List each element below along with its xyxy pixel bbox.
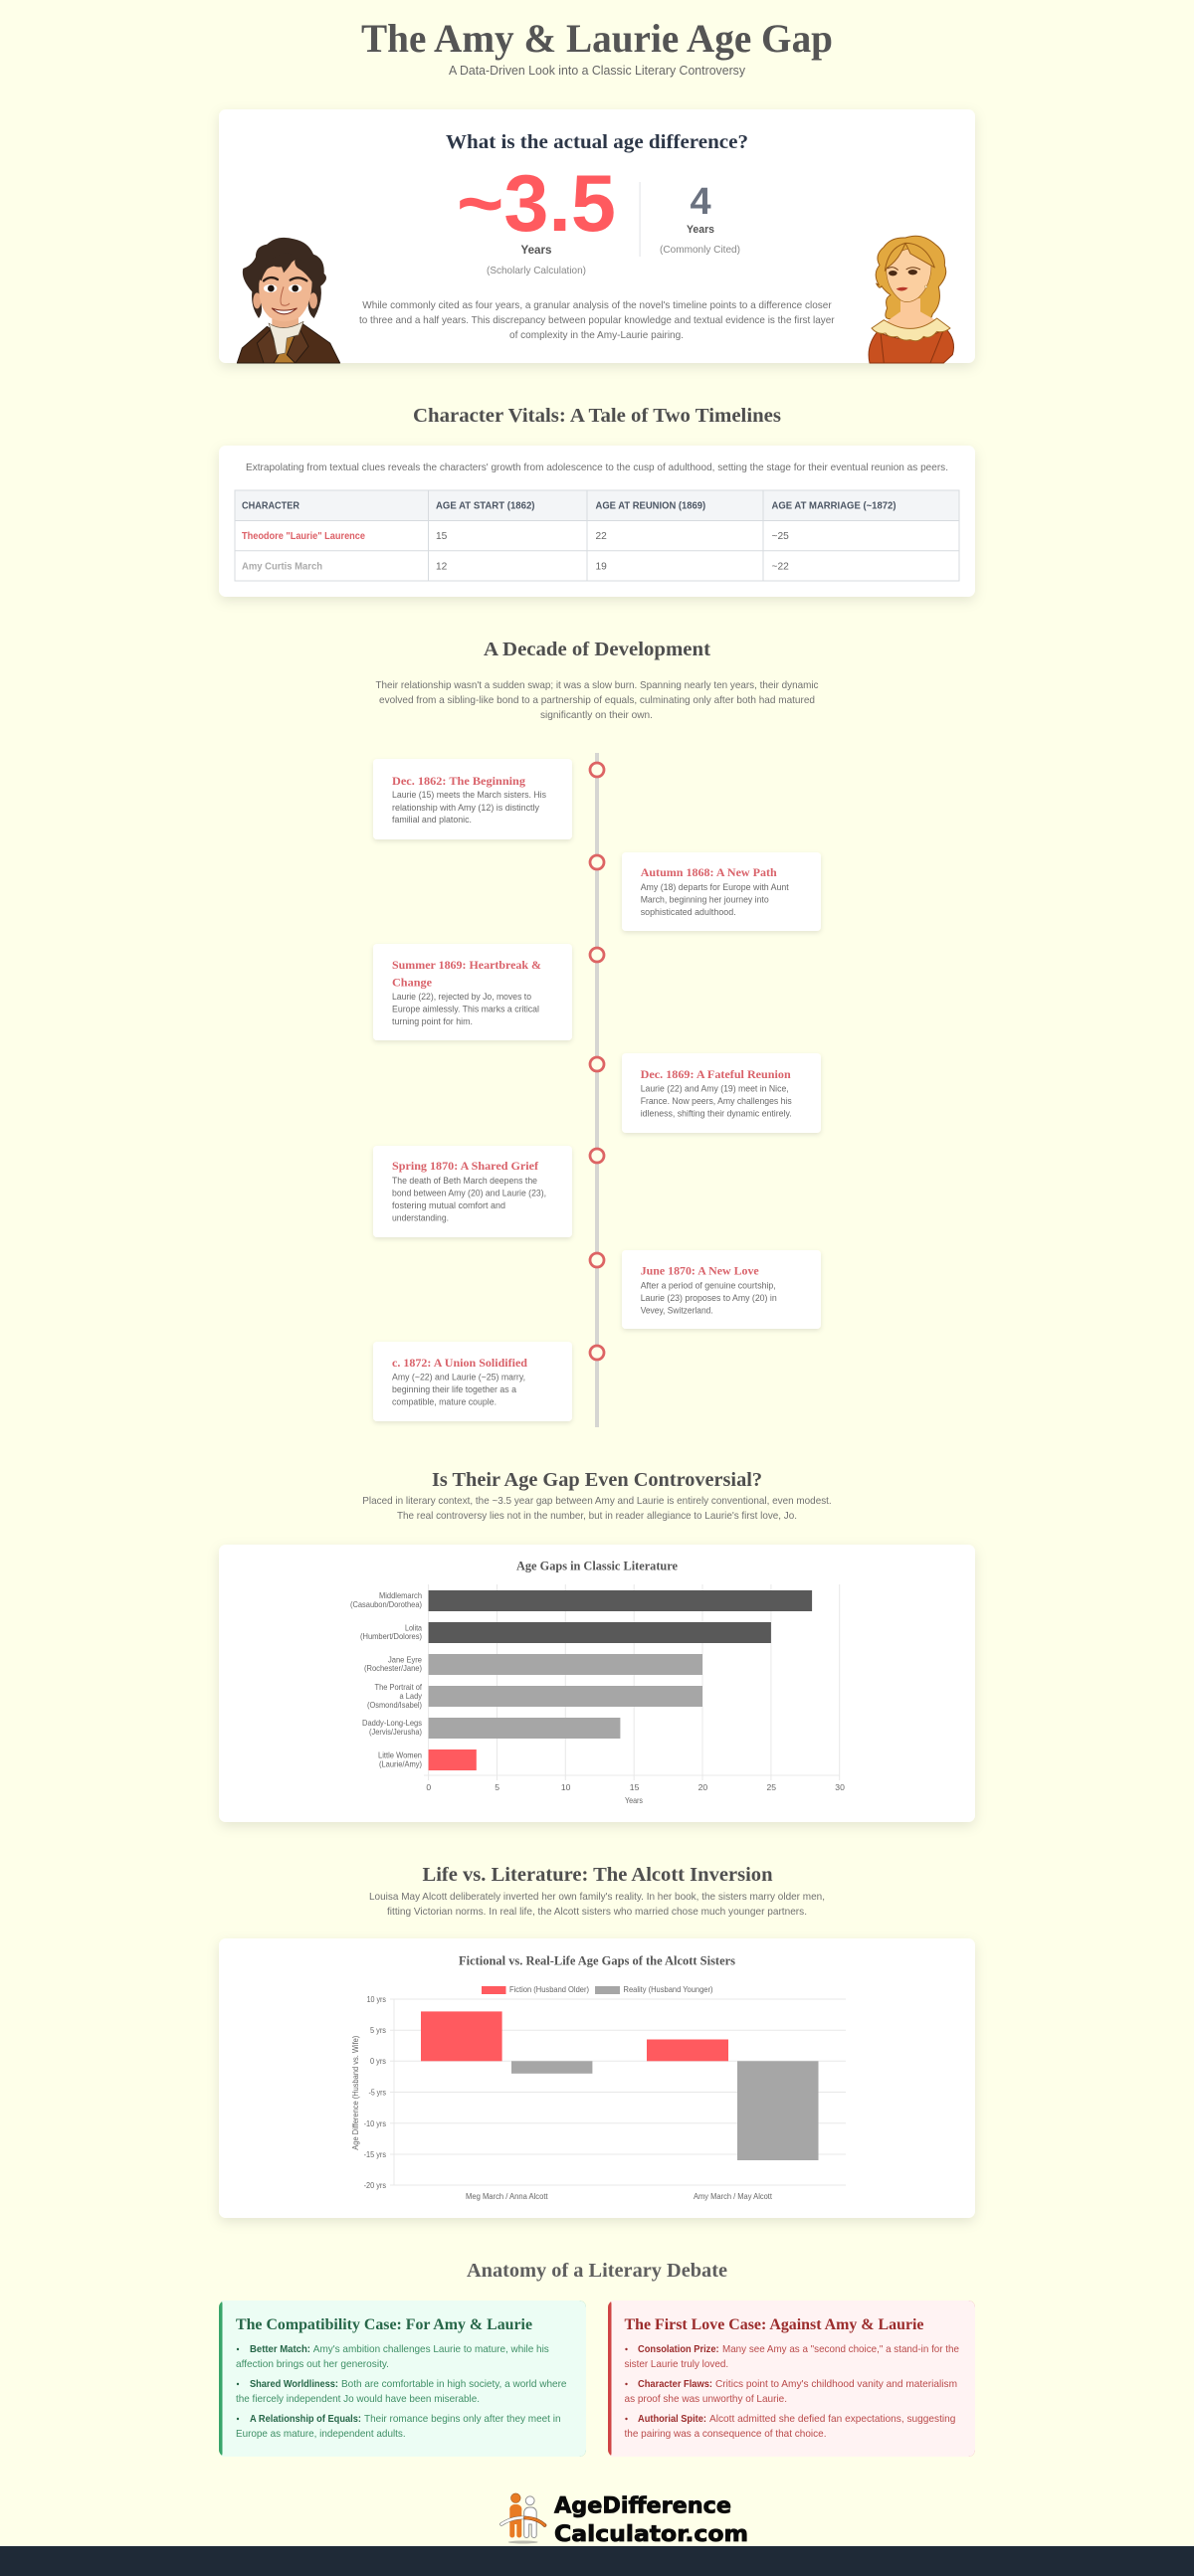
panel heading: first love case: The First Love Case: Against Amy & Laurie xyxy=(625,2316,923,2333)
stat: commonly cited: (Commonly Cited) xyxy=(660,245,740,256)
timeline event: Spring 1870: Spring 1870: A Shared Grief xyxy=(392,1159,539,1173)
timeline event: c. 1872: Amy (~22) and Laurie (~25) marry, xyxy=(392,1373,525,1382)
bar chart: age gaps in classic literature: (Rochester/Jane) xyxy=(364,1663,422,1673)
panel: case against xyxy=(608,2300,975,2457)
list: first love arguments: Alcott admitted she defied fan expectations, suggesting xyxy=(709,2414,956,2425)
bar chart: age gaps in classic literature: Little Women xyxy=(378,1750,422,1760)
bar chart: age gaps in classic literature: 10 xyxy=(561,1782,571,1792)
legend: Fiction (Husband Older) xyxy=(509,1984,589,1994)
text block: decade intro: evolved from a sibling-like bond to a partnership of equals, culminating only after both had matured xyxy=(379,695,815,706)
panel: Alcott chart xyxy=(219,1938,975,2218)
timeline event: Autumn 1868 xyxy=(590,852,821,931)
table: ~22 xyxy=(772,561,789,573)
table: AGE AT REUNION (1869) xyxy=(595,501,705,511)
stat: commonly cited: Years xyxy=(687,224,714,236)
bar chart: age gaps in classic literature: (Jervis/Jerusha) xyxy=(369,1727,422,1737)
text block: Alcott inversion intro: fitting Victorian norms. In real life, the Alcott sisters who married chose much younger partners. xyxy=(387,1907,807,1918)
heading: literary debate: Anatomy of a Literary Debate xyxy=(467,2260,727,2282)
bar chart: fiction vs reality: -10 yrs xyxy=(364,2118,386,2128)
text block: controversy intro: The real controversy lies not in the number, but in reader allegiance to Laurie's first love, Jo. xyxy=(397,1511,797,1522)
timeline event: Summer 1869: Change xyxy=(392,975,433,989)
list: first love arguments: Critics point to Amy's childhood vanity and materialism xyxy=(715,2379,957,2390)
subtitle: A Data-Driven Look into a Classic Literary Controversy xyxy=(449,63,745,78)
timeline event: Summer 1869: Europe aimlessly. This marks a critical xyxy=(392,1005,539,1014)
bar chart: fiction vs reality: -20 yrs xyxy=(364,2180,386,2190)
bar chart: fiction vs reality: Amy March / May Alcott xyxy=(694,2191,773,2201)
list: compatibility arguments: A Relationship of Equals: xyxy=(250,2414,361,2425)
stat: scholarly calculation: (Scholarly Calculation) xyxy=(487,266,586,276)
bar chart: age gaps in classic literature: Middlemarch xyxy=(379,1590,422,1600)
list: compatibility arguments: Both are comfortable in high society, a world where xyxy=(341,2379,567,2390)
bar chart: fiction vs reality: 0 yrs xyxy=(370,2056,386,2066)
bar chart: age gaps in classic literature: Years xyxy=(625,1795,643,1805)
bar chart: fiction vs reality: 5 yrs xyxy=(370,2025,386,2035)
table: CHARACTER xyxy=(242,501,300,511)
text block: decade intro: Their relationship wasn't a sudden swap; it was a slow burn. Spanning nearly ten years, their dynamic xyxy=(376,680,818,691)
heading: Alcott inversion: Life vs. Literature: The Alcott Inversion xyxy=(422,1864,772,1886)
table: 19 xyxy=(595,561,607,573)
timeline event: c. 1872: beginning their life together as a xyxy=(392,1384,516,1394)
text block: decade intro: significantly on their own. xyxy=(540,710,653,721)
timeline event: Autumn 1868: Autumn 1868: A New Path xyxy=(641,865,777,879)
timeline event: Dec 1862 xyxy=(373,759,604,839)
list: compatibility arguments: affection brings out her generosity. xyxy=(236,2359,389,2370)
timeline event: Spring 1870: bond between Amy (20) and Laurie (23), xyxy=(392,1188,546,1197)
panel: character vitals table xyxy=(219,446,975,597)
timeline event: Summer 1869: Laurie (22), rejected by Jo, moves to xyxy=(392,992,531,1002)
timeline event: c. 1872 xyxy=(373,1342,604,1421)
list: compatibility arguments: Amy's ambition challenges Laurie to mature, while his xyxy=(313,2344,549,2355)
bar chart: age gaps in classic literature: 25 xyxy=(766,1782,776,1792)
timeline event: Dec 1862: Dec. 1862: The Beginning xyxy=(392,774,525,788)
timeline event: Spring 1870: The death of Beth March deepens the xyxy=(392,1176,537,1186)
list: first love arguments: Many see Amy as a "second choice," a stand-in for the xyxy=(722,2344,959,2355)
text block: Alcott inversion intro xyxy=(369,1892,825,1918)
timeline event: Autumn 1868: sophisticated adulthood. xyxy=(641,907,736,917)
bar chart: age gaps in classic literature: (Casaubon/Dorothea) xyxy=(350,1599,422,1609)
panel: case for xyxy=(219,2300,586,2457)
list: compatibility arguments xyxy=(236,2344,567,2440)
list: first love arguments: Character Flaws: xyxy=(638,2379,712,2390)
logo: Age Difference Calculator xyxy=(501,2493,748,2547)
bar chart: age gaps in classic literature: 20 xyxy=(698,1782,707,1792)
timeline event: Summer 1869: turning point for him. xyxy=(392,1016,473,1026)
text block: controversy intro xyxy=(362,1496,832,1522)
timeline event: Dec 1862: relationship with Amy (12) is distinctly xyxy=(392,803,539,813)
panel: age gaps chart xyxy=(219,1545,975,1822)
list: first love arguments: as proof she was unworthy of Laurie. xyxy=(625,2394,787,2405)
stat: commonly cited: 4 xyxy=(691,181,711,223)
timeline event: Dec 1869: idleness, shifting their dynamic entirely. xyxy=(641,1108,792,1118)
timeline event: c. 1872: compatible, mature couple. xyxy=(392,1396,497,1406)
text block: controversy intro: Placed in literary context, the ~3.5 year gap between Amy and Laurie is entirely conventional, even modest. xyxy=(362,1496,832,1507)
timeline event: Spring 1870 xyxy=(373,1146,604,1237)
panel heading: compatibility case: The Compatibility Case: For Amy & Laurie xyxy=(236,2316,532,2333)
table: ~25 xyxy=(772,531,789,542)
heading: age difference question: What is the actual age difference? xyxy=(446,131,748,153)
text block: table intro: Extrapolating from textual clues reveals the characters' growth from adolescence to the cusp of adulthood, setting the stage for their eventual reunion as peers. xyxy=(246,462,948,473)
chart title: Age Gaps in Classic Literature xyxy=(516,1558,678,1573)
legend xyxy=(482,1984,713,1994)
bar chart: age gaps in classic literature: Daddy-Long-Legs xyxy=(362,1718,422,1728)
timeline event: Autumn 1868: March, beginning her journey into xyxy=(641,895,769,905)
panel: actual age difference xyxy=(219,109,975,363)
timeline event: c. 1872: c. 1872: A Union Solidified xyxy=(392,1356,527,1370)
list: first love arguments: sister Laurie truly loved. xyxy=(625,2359,728,2370)
table: AGE AT START (1862) xyxy=(436,501,535,511)
bar chart: fiction vs reality: 10 yrs xyxy=(367,1994,386,2004)
list: first love arguments: the pairing was a consequence of that choice. xyxy=(625,2429,826,2440)
timeline event: Summer 1869 xyxy=(373,944,604,1040)
timeline event: June 1870: June 1870: A New Love xyxy=(641,1263,759,1277)
timeline event: Dec 1869: Laurie (22) and Amy (19) meet in Nice, xyxy=(641,1084,789,1094)
bar chart: age gaps in classic literature: 15 xyxy=(630,1782,640,1792)
text block: Alcott inversion intro: Louisa May Alcott deliberately inverted her own family's reality. In her book, the sisters marry older men, xyxy=(369,1892,825,1903)
timeline event: June 1870 xyxy=(590,1250,821,1329)
footer bar xyxy=(0,2546,1194,2576)
heading: character vitals: Character Vitals: A Tale of Two Timelines xyxy=(413,405,781,427)
icon: Laurie portrait xyxy=(237,238,340,363)
table: Amy Curtis March xyxy=(242,561,322,573)
table: 22 xyxy=(595,531,607,542)
timeline event: Spring 1870: fostering mutual comfort and xyxy=(392,1200,505,1210)
text block: age difference explanation: of complexity in the Amy-Laurie pairing. xyxy=(509,330,684,341)
title: The Amy & Laurie Age Gap xyxy=(361,16,833,61)
timeline event: Autumn 1868: Amy (18) departs for Europe with Aunt xyxy=(641,882,789,892)
list: compatibility arguments: Their romance begins only after they meet in xyxy=(364,2414,561,2425)
list: compatibility arguments: the fiercely independent Jo would have been miserable. xyxy=(236,2394,480,2405)
bar chart: fiction vs reality xyxy=(350,1994,846,2201)
bar chart: fiction vs reality: -15 yrs xyxy=(364,2149,386,2159)
heading: controversy: Is Their Age Gap Even Controversial? xyxy=(432,1469,762,1491)
timeline event: Summer 1869: Summer 1869: Heartbreak & xyxy=(392,958,541,972)
bar chart: fiction vs reality: Meg March / Anna Alcott xyxy=(466,2191,548,2201)
list: first love arguments xyxy=(625,2344,959,2440)
table: AGE AT MARRIAGE (~1872) xyxy=(772,501,896,511)
bar chart: age gaps in classic literature: a Lady xyxy=(400,1691,423,1701)
bar chart: age gaps in classic literature: (Osmond/Isabel) xyxy=(367,1700,422,1710)
bar chart: age gaps in classic literature: 0 xyxy=(426,1782,431,1792)
list: first love arguments: Consolation Prize: xyxy=(638,2344,719,2355)
timeline event: Dec 1862: Laurie (15) meets the March sisters. His xyxy=(392,790,546,800)
stat: scholarly calculation: ~3.5 xyxy=(457,159,616,249)
bar chart: age gaps in classic literature xyxy=(350,1584,845,1805)
bar chart: age gaps in classic literature: 30 xyxy=(835,1782,845,1792)
stat: scholarly calculation: Years xyxy=(521,243,552,257)
timeline event: Dec 1862: familial and platonic. xyxy=(392,815,472,825)
table xyxy=(235,490,959,581)
list: compatibility arguments: Better Match: xyxy=(250,2344,310,2355)
text block: age difference explanation: While commonly cited as four years, a granular analysis of the novel's timeline points to a difference closer xyxy=(362,300,832,311)
bar chart: age gaps in classic literature: Lolita xyxy=(405,1623,422,1633)
list: compatibility arguments: Europe as mature, independent adults. xyxy=(236,2429,406,2440)
timeline event: Dec 1869 xyxy=(590,1053,821,1133)
text block: decade intro xyxy=(376,680,818,721)
logo: Age Difference Calculator: AgeDifference xyxy=(554,2494,731,2519)
timeline event: June 1870: Laurie (23) proposes to Amy (20) in xyxy=(641,1293,777,1303)
icon: two figures with arc xyxy=(501,2493,545,2544)
bar chart: age gaps in classic literature: (Laurie/Amy) xyxy=(379,1758,422,1768)
bar chart: fiction vs reality: -5 yrs xyxy=(368,2087,386,2097)
bar chart: fiction vs reality: Age Difference (Husband vs. Wife) xyxy=(350,2036,360,2150)
stat: commonly cited xyxy=(660,181,740,256)
text block: age difference explanation xyxy=(359,300,835,341)
bar chart: age gaps in classic literature: 5 xyxy=(495,1782,499,1792)
chart title: Fictional vs. Real-Life Age Gaps of the Alcott Sisters xyxy=(459,1953,735,1967)
timeline event: Spring 1870: understanding. xyxy=(392,1213,449,1223)
table: 12 xyxy=(436,561,448,573)
text block: age difference explanation: to three and a half years. This discrepancy between popular knowledge and textual evidence is the first layer xyxy=(359,315,835,326)
icon: Amy portrait xyxy=(869,236,953,363)
timeline event: June 1870: Vevey, Switzerland. xyxy=(641,1305,713,1315)
table: Theodore "Laurie" Laurence xyxy=(242,531,365,542)
timeline event: Dec 1869: France. Now peers, Amy challenges his xyxy=(641,1096,792,1106)
bar chart: age gaps in classic literature: (Humbert/Dolores) xyxy=(360,1631,422,1641)
table: 15 xyxy=(436,531,448,542)
legend: Reality (Husband Younger) xyxy=(623,1984,713,1994)
list: first love arguments: Authorial Spite: xyxy=(638,2414,706,2425)
logo: Age Difference Calculator: Calculator.com xyxy=(554,2522,748,2547)
timeline xyxy=(373,753,821,1427)
list: compatibility arguments: Shared Worldliness: xyxy=(250,2379,338,2390)
timeline event: Dec 1869: Dec. 1869: A Fateful Reunion xyxy=(641,1067,791,1081)
bar chart: age gaps in classic literature: The Portrait of xyxy=(374,1682,423,1692)
timeline event: June 1870: After a period of genuine courtship, xyxy=(641,1281,776,1291)
bar chart: age gaps in classic literature: Jane Eyre xyxy=(388,1655,422,1665)
heading: decade of development: A Decade of Development xyxy=(484,639,710,660)
